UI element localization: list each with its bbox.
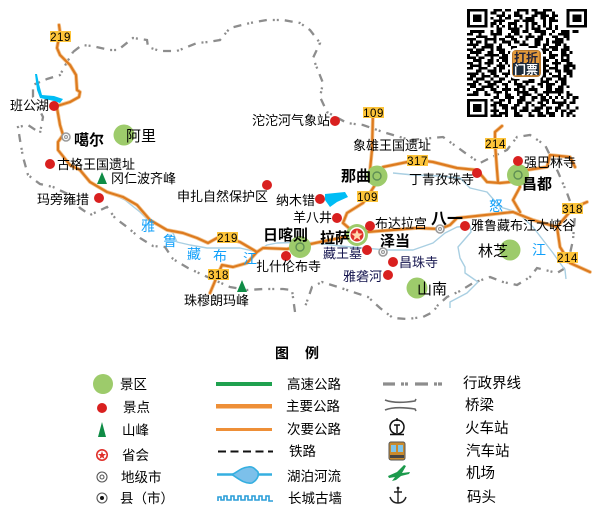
- route shields: 214: [557, 253, 578, 265]
- legend title: 图: [275, 345, 289, 361]
- legend: attraction: 景点: [123, 400, 150, 415]
- roads: [57, 25, 590, 293]
- map place labels: 古格王国遗址: [57, 157, 135, 172]
- map place labels: [10, 98, 576, 308]
- legend: bus station: [389, 442, 510, 460]
- map place labels: 纳木错: [276, 193, 315, 208]
- legend: prefecture city: [97, 469, 162, 485]
- legend: dock: [390, 487, 496, 506]
- river labels: 布: [213, 248, 227, 264]
- map place labels: 雅砻河: [343, 269, 382, 284]
- map place labels: 昌珠寺: [399, 255, 438, 270]
- legend: great wall: 长城古墙: [288, 491, 342, 506]
- legend title: [275, 345, 319, 361]
- legend: great wall: [218, 491, 342, 506]
- legend: airport: [388, 465, 495, 482]
- route shields: 219: [217, 233, 238, 245]
- legend: railway: 铁路: [289, 444, 316, 459]
- legend: lakes and rivers: 湖泊河流: [287, 469, 341, 484]
- legend: provincial capital: 省会: [122, 448, 149, 463]
- legend: administrative boundary: 行政界线: [463, 375, 521, 392]
- map place labels: 强巴林寺: [524, 155, 576, 170]
- legend: secondary road: [216, 422, 341, 437]
- map place labels: 丁青孜珠寺: [409, 172, 474, 187]
- map place labels: 班公湖: [10, 98, 49, 113]
- legend: bridge: 桥梁: [465, 397, 494, 414]
- legend: bus station: 汽车站: [466, 443, 510, 460]
- scenic areas: [114, 124, 529, 298]
- route shields: [50, 31, 583, 282]
- QR centre logo: 打折: [514, 50, 538, 65]
- mountain icons: [97, 172, 247, 292]
- legend: expressway: 高速公路: [287, 376, 341, 392]
- map place labels: 玛旁雍措: [37, 192, 89, 207]
- map place labels: 沱沱河气象站: [252, 113, 330, 128]
- legend: mountain: 山峰: [122, 423, 149, 438]
- map place labels: 泽当: [380, 232, 410, 250]
- QR code: [467, 9, 587, 117]
- map place labels: 羊八井: [293, 210, 332, 225]
- legend: provincial capital: [96, 448, 149, 463]
- map place labels: 阿里: [126, 128, 156, 145]
- river labels: 鲁: [163, 233, 177, 249]
- legend: prefecture city: 地级市: [121, 469, 162, 485]
- map place labels: 冈仁波齐峰: [111, 171, 176, 186]
- city markers: [62, 133, 522, 256]
- map place labels: 申扎自然保护区: [177, 189, 268, 204]
- route shields: 318: [208, 270, 229, 282]
- river labels: 江: [243, 251, 257, 267]
- route shields: 318: [562, 204, 583, 216]
- legend: county: 县（市）: [120, 490, 174, 506]
- legend: mountain: [98, 422, 149, 438]
- legend: scenic area: [93, 374, 147, 394]
- legend: main road: 主要公路: [286, 399, 340, 414]
- rivers: [108, 173, 566, 308]
- route shields: 109: [363, 108, 384, 120]
- QR centre logo: 门票: [514, 62, 538, 77]
- map place labels: 山南: [417, 281, 447, 298]
- map place labels: 日喀则: [263, 226, 308, 244]
- river labels: [141, 198, 546, 267]
- route shields: 219: [50, 32, 71, 44]
- map place labels: 林芝: [478, 243, 508, 260]
- legend: administrative boundary: [383, 375, 521, 392]
- administrative boundary: [18, 20, 575, 319]
- legend: dock: 码头: [467, 489, 496, 506]
- map place labels: 象雄王国遗址: [353, 138, 431, 153]
- map place labels: 拉萨: [320, 229, 350, 247]
- legend: county: [97, 490, 174, 506]
- legend: train station: 火车站: [465, 420, 508, 437]
- legend: main road: [216, 399, 340, 414]
- legend: train station: [390, 418, 508, 437]
- lake: Namtso: [325, 192, 348, 207]
- route shields: 214: [485, 139, 506, 151]
- map place labels: 珠穆朗玛峰: [184, 293, 249, 308]
- legend: secondary road: 次要公路: [287, 422, 341, 437]
- map place labels: 布达拉宫: [375, 216, 427, 231]
- map place labels: 噶尔: [74, 132, 104, 149]
- river labels: 江: [532, 242, 546, 258]
- map place labels: 雅鲁藏布江大峡谷: [471, 218, 575, 233]
- route shields: 317: [407, 156, 428, 168]
- legend: lakes and rivers: [217, 467, 341, 484]
- route shields: 109: [357, 192, 378, 204]
- Lhasa capital marker: [346, 224, 368, 246]
- map place labels: 藏王墓: [323, 246, 362, 261]
- map place labels: 八一: [431, 211, 463, 228]
- legend: scenic area: 景区: [120, 377, 147, 392]
- legend: attraction: [97, 400, 150, 415]
- river labels: 藏: [187, 246, 201, 262]
- legend: airport: 机场: [466, 465, 495, 482]
- map place labels: 那曲: [341, 168, 371, 185]
- QR centre logo: [510, 48, 543, 79]
- legend: expressway: [216, 376, 341, 392]
- river labels: 雅: [141, 218, 155, 234]
- legend title: 例: [305, 345, 319, 361]
- map place labels: 扎什伦布寺: [256, 259, 321, 274]
- lake: Bangong: [35, 74, 63, 103]
- legend: railway: [218, 444, 316, 459]
- legend: bridge: [385, 397, 494, 414]
- map place labels: 昌都: [522, 176, 552, 193]
- attraction dots: [45, 101, 523, 280]
- river labels: 怒: [489, 198, 503, 214]
